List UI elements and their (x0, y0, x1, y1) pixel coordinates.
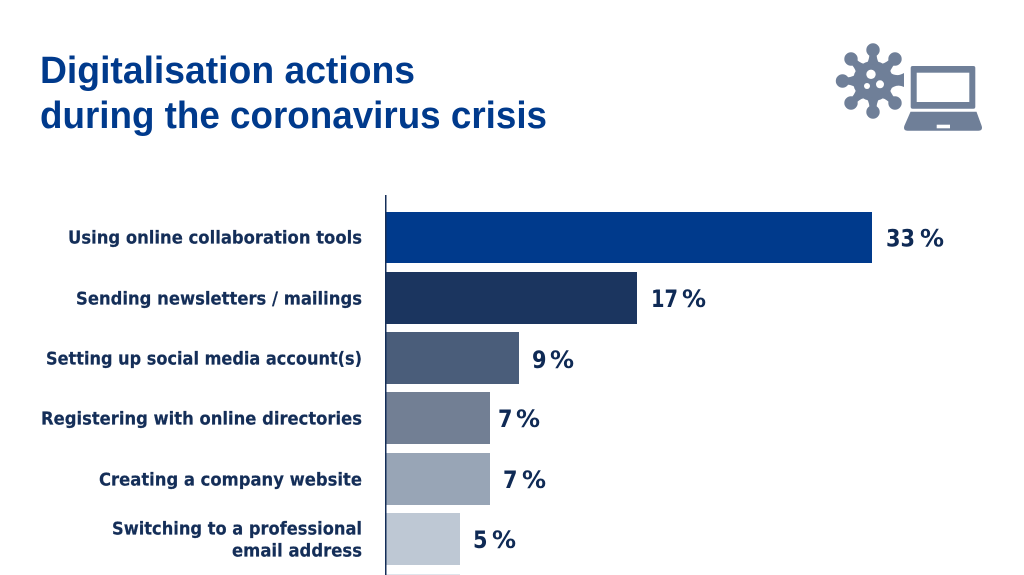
bar: newsletters: % (682, 285, 706, 313)
bar: online directories: % (516, 405, 540, 433)
bar: social media: % (550, 346, 574, 374)
bar: online directories (41, 392, 540, 444)
bar: social media: Setting up social media account(s) (46, 348, 362, 370)
bar: newsletters: Sending newsletters / mailings (76, 288, 362, 310)
bar: company website: % (522, 466, 546, 494)
bar: social media (46, 332, 574, 384)
bar: company website (99, 453, 546, 505)
bar: online directories: Registering with online directories (41, 408, 362, 430)
bar: professional email address: email address (232, 540, 362, 562)
icon: virus and laptop (836, 43, 982, 131)
bar: professional email address (112, 513, 516, 565)
icon: virus (836, 43, 904, 119)
bar: professional email address: % (492, 526, 516, 554)
bar: company website: Creating a company website (99, 470, 362, 490)
title: Digitalisation actions (40, 50, 415, 92)
bar: company website: 7 (503, 466, 518, 494)
bar: professional email address: 5 (473, 526, 488, 554)
bar: professional email address: Switching to a professional (112, 518, 362, 540)
bar: online collaboration tools (68, 212, 944, 263)
bar: newsletters (76, 272, 706, 324)
bar chart (41, 195, 944, 575)
title: during the coronavirus crisis (40, 95, 547, 137)
bar: social media: 9 (532, 346, 546, 374)
title (40, 50, 547, 137)
bar: cut-off next bar (386, 574, 460, 575)
bar: online directories: 7 (498, 405, 512, 433)
bar: online collaboration tools: 33 (886, 224, 915, 252)
icon: laptop (904, 66, 982, 131)
bar: online collaboration tools: Using online collaboration tools (68, 228, 362, 248)
bar: newsletters: 17 (651, 285, 678, 313)
bar: online collaboration tools: % (920, 224, 944, 252)
axis (385, 195, 386, 575)
